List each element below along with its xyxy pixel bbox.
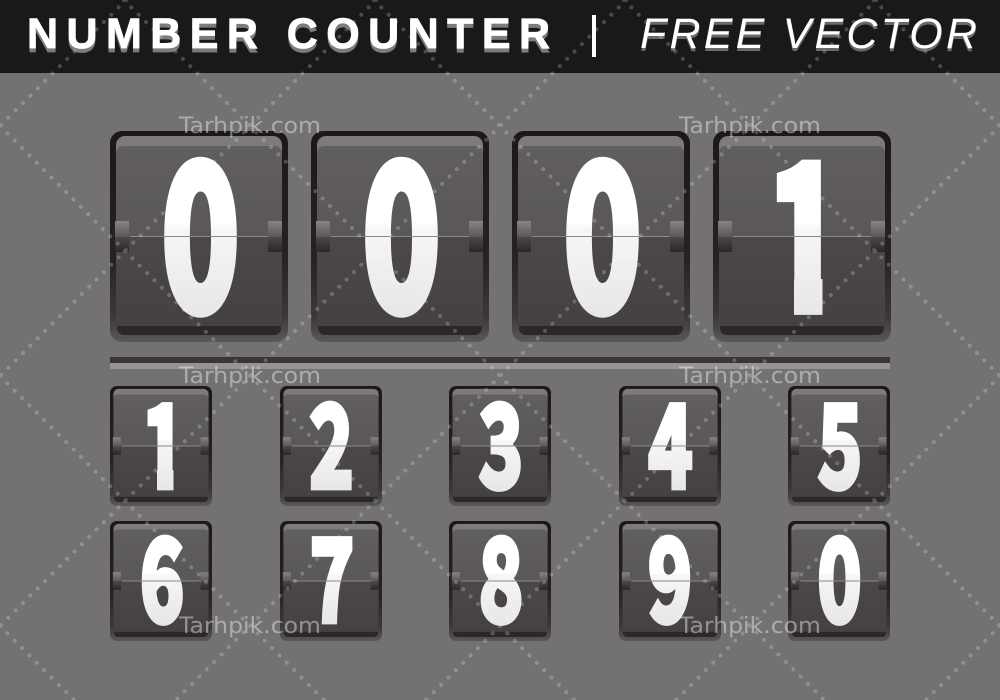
- small card: 7: [280, 491, 382, 654]
- small card: 4: 4: [649, 357, 692, 520]
- title: number counter: NUMBER COUNTER: [27, 10, 550, 58]
- watermark text: Tarhpik.com: [678, 614, 821, 639]
- small card: 1: [110, 386, 212, 506]
- title: number counter shadow: NUMBER COUNTER: [27, 14, 550, 62]
- large card: 0: [110, 79, 288, 367]
- small card: 0: [788, 491, 890, 654]
- large card: 0: 0: [162, 79, 239, 367]
- watermark text: Tarhpik.com: [178, 114, 321, 139]
- small card: 0: 0: [818, 491, 861, 654]
- large card: 1: [713, 131, 891, 342]
- small card: 6: [110, 491, 212, 654]
- small card: 5: 5: [818, 357, 862, 520]
- small card: 8: 8: [479, 491, 523, 654]
- small card: 8: [449, 491, 551, 654]
- large counter: 0001: [110, 131, 891, 342]
- small card: 3: 3: [479, 357, 523, 520]
- subtitle: free vector: FREE VECTOR: [640, 10, 977, 58]
- large card: 0: [311, 79, 489, 367]
- small card: 9: 9: [648, 491, 692, 654]
- small card: 5: [788, 357, 890, 520]
- large card: 0: 0: [564, 79, 641, 367]
- small card: 4: [619, 357, 721, 520]
- large card: 0: [512, 79, 690, 367]
- small card: 6: 6: [140, 491, 184, 654]
- small card: 7: 7: [310, 491, 354, 654]
- watermark text: Tarhpik.com: [178, 364, 321, 389]
- watermark text: Tarhpik.com: [678, 364, 821, 389]
- watermark text: Tarhpik.com: [678, 114, 821, 139]
- small card: 9: [619, 491, 721, 654]
- large card: 0: 0: [363, 79, 440, 367]
- digit row 1: [110, 386, 890, 506]
- watermark text: [178, 114, 821, 639]
- header band: [0, 0, 1000, 73]
- small card: 2: [280, 357, 382, 520]
- small card: 3: [449, 357, 551, 520]
- watermark text: Tarhpik.com: [178, 614, 321, 639]
- title separator: [592, 15, 596, 57]
- digit row 2: [110, 491, 890, 654]
- divider rule: [110, 357, 890, 369]
- subtitle: free vector shadow: FREE VECTOR: [640, 13, 977, 61]
- small card: 2: 2: [310, 357, 353, 520]
- small card: 1: 1: [142, 357, 185, 520]
- large card: 1: 1: [767, 79, 843, 367]
